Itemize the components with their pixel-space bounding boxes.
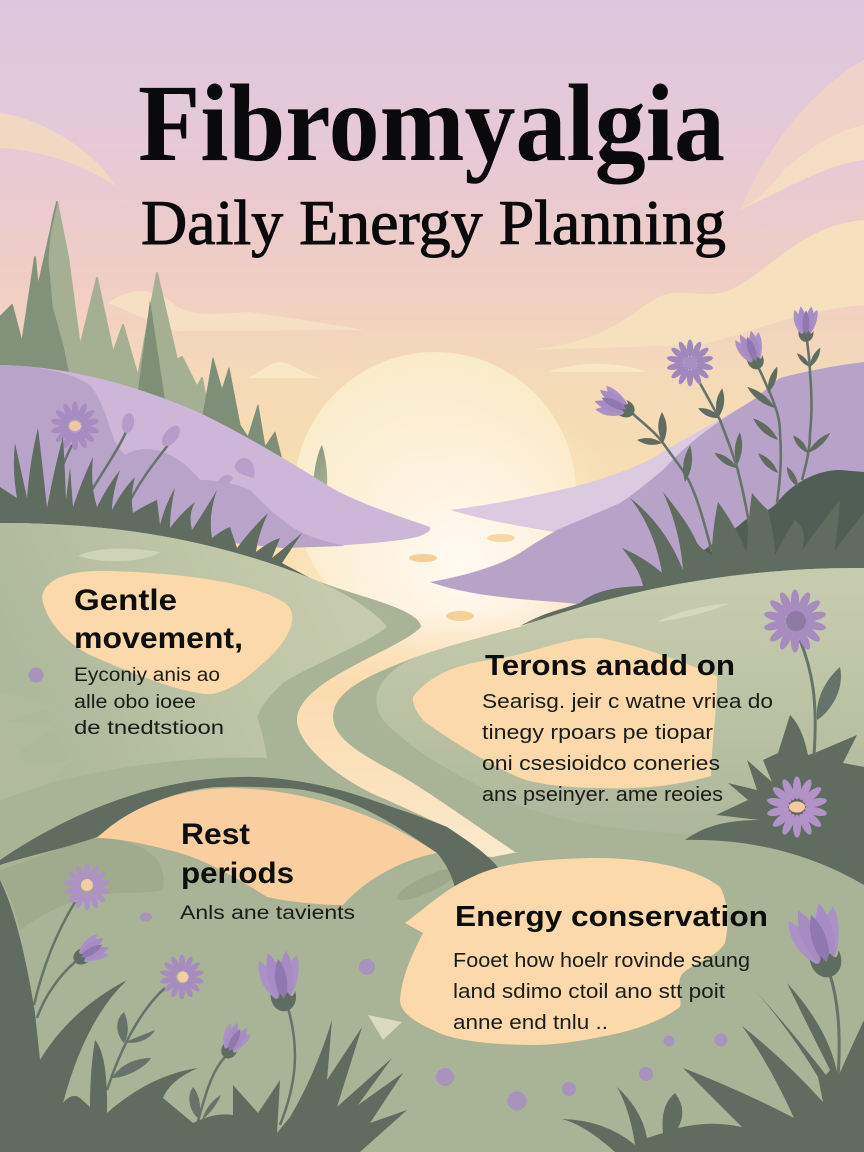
left hill flowers: [50, 402, 184, 505]
sky wisps and clouds: [0, 60, 864, 378]
blob background: [42, 571, 292, 694]
right hill: [333, 568, 864, 900]
river pools: [409, 534, 515, 621]
body text: land sdimo ctoil ano stt poit: [453, 981, 725, 1003]
back mound right: [683, 470, 864, 575]
title: Fibromyalgia: [138, 62, 725, 184]
blob background: [400, 858, 727, 1045]
panel: rest periods: [97, 788, 437, 924]
lilac hills right: [430, 362, 864, 604]
body text: Fooet how hoelr rovinde saung: [453, 950, 750, 972]
dark grass right: [520, 492, 864, 626]
panel: gentle movement: [42, 571, 292, 739]
lilac hills left: [0, 365, 430, 548]
body text: Eyconiy anis ao: [74, 665, 220, 686]
bottom right foliage: [562, 897, 864, 1152]
left hill: [0, 523, 470, 880]
body text: tinegy rpoars pe tiopar: [482, 722, 713, 744]
heading: Rest: [181, 818, 250, 851]
decorative dots: [28, 668, 728, 1110]
heading second line: movement,: [74, 622, 243, 655]
body text: Anls ane tavients: [180, 903, 355, 924]
bottom hill: [0, 835, 864, 1152]
pale stone: [368, 1015, 402, 1040]
blob background: [97, 788, 437, 905]
glow behind river: [240, 390, 640, 740]
body text: alle obo ioee: [74, 692, 196, 713]
distant trees: [0, 202, 327, 486]
body text: anne end tnlu ..: [453, 1012, 608, 1034]
river band: [280, 610, 540, 880]
panel: energy conservation: [400, 858, 768, 1045]
panel: terons anadd on: [413, 638, 773, 806]
dark grass left: [0, 428, 310, 578]
heading: Energy conservation: [455, 901, 768, 933]
body text: oni csesioidco coneries: [482, 753, 720, 775]
bottom left flowers: [34, 864, 309, 1125]
sun: [294, 352, 576, 634]
body text: Searisg. jeir c watne vriea do: [482, 691, 773, 713]
right plant with flower: [685, 589, 864, 885]
heading: Terons anadd on: [485, 650, 735, 682]
body text: ans pseinyer. ame reoies: [482, 784, 723, 806]
heading: Gentle: [74, 584, 177, 617]
right meadow flowers: [589, 306, 832, 552]
blob background: [413, 638, 717, 788]
bottom left foliage: [0, 880, 407, 1152]
heading second line: periods: [181, 857, 294, 890]
subtitle: Daily Energy Planning: [141, 188, 726, 258]
dark arc over rest periods: [0, 777, 500, 888]
body text: de tnedtstioon: [74, 718, 224, 739]
